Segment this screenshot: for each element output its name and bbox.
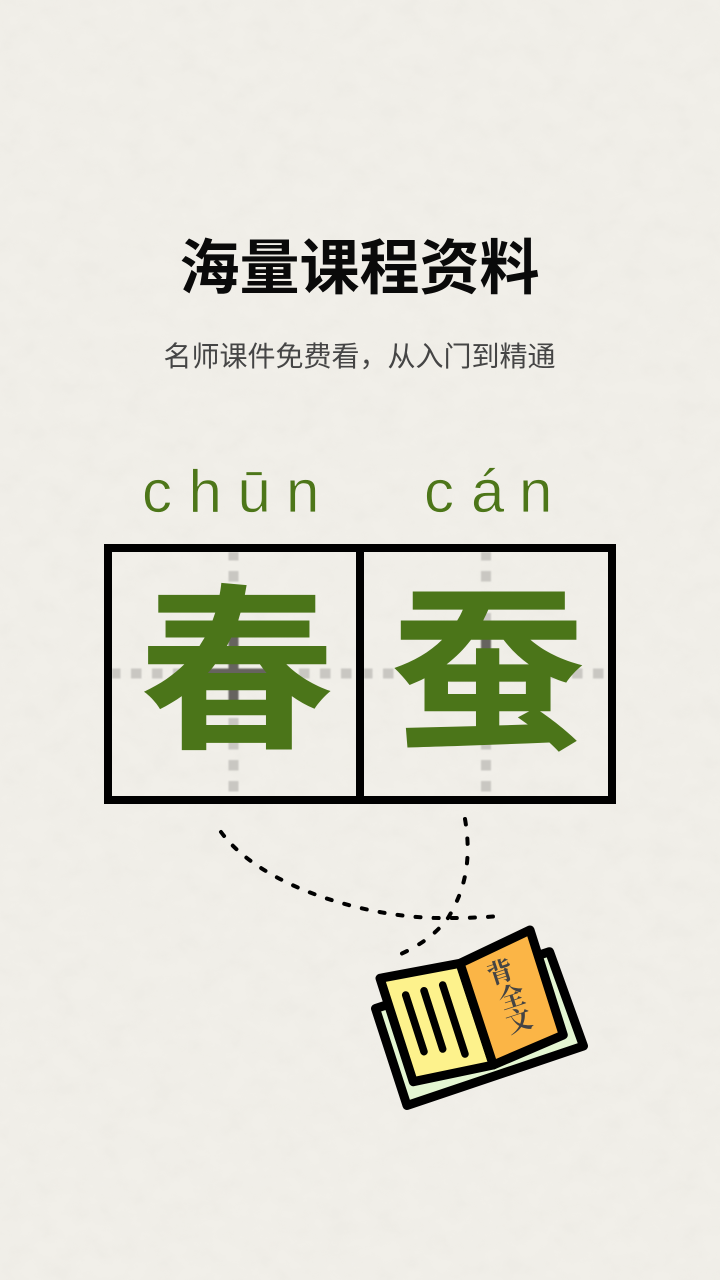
dashed curve: from right character to book xyxy=(402,819,468,954)
right cell guide lines xyxy=(364,552,608,796)
book title: 文 xyxy=(503,1004,536,1039)
pinyin: chun: ū xyxy=(238,458,271,525)
dashed curve: from left character to book xyxy=(221,832,493,918)
subtitle: 名师课件免费看，从入门到精通 xyxy=(163,341,556,372)
pinyin: can: c xyxy=(424,458,454,525)
left page xyxy=(380,963,493,1082)
book back cover xyxy=(376,952,584,1106)
right page xyxy=(460,930,563,1065)
character grid xyxy=(108,548,612,800)
pinyin: can: á xyxy=(471,458,505,525)
icon: open book xyxy=(376,930,584,1106)
page text lines xyxy=(406,985,465,1054)
book title: 背 xyxy=(484,955,517,991)
title: 海量课程资料 xyxy=(180,235,540,302)
pinyin: can: n xyxy=(519,458,552,525)
character: can: 蚕 xyxy=(391,573,586,773)
pinyin: chun: h xyxy=(188,458,222,525)
pinyin: chun: c xyxy=(142,458,172,525)
character: chun: 春 xyxy=(139,573,335,773)
left cell guide lines xyxy=(112,552,356,796)
book title: 全 xyxy=(495,980,529,1015)
pinyin: chun: n xyxy=(286,458,319,525)
grid frame xyxy=(108,548,612,800)
book title xyxy=(484,955,536,1039)
